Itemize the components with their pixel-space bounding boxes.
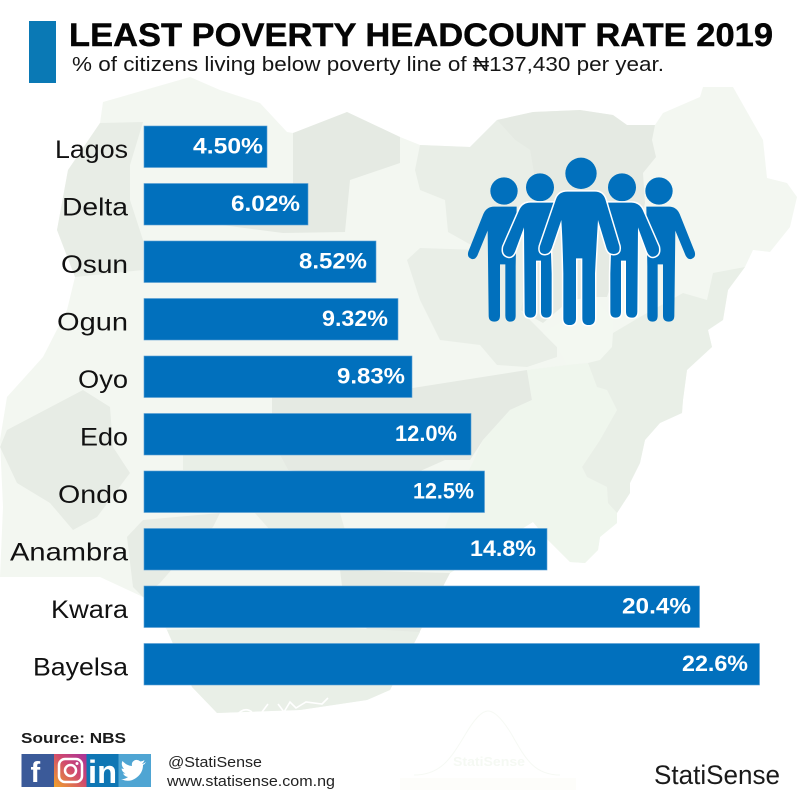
icon: facebook: f [30,757,40,789]
bar: Delta: Delta [62,194,128,222]
bar: Osun [61,241,376,282]
bar: Kwara [51,586,700,628]
bar: Ondo [58,471,484,512]
brand logotype: StatiSense [654,760,780,790]
bar: Osun: Osun [61,251,128,279]
bar: Osun: 8.52% [299,248,367,274]
bar: Ondo: Ondo [58,481,128,509]
bar: Lagos [55,126,267,168]
icon: instagram [54,754,86,787]
title: LEAST POVERTY HEADCOUNT RATE 2019 [69,17,773,53]
subtitle: % of citizens living below poverty line of ₦137,430 per year. [72,54,664,76]
bar: Delta: 6.02% [231,191,300,216]
bar: Delta [62,184,308,225]
website address: www.statisense.com.ng [166,774,335,790]
watermark: bell curve logo: StatiSense [453,754,525,769]
bar: Ondo: 12.5% [413,478,474,504]
bar: Oyo: Oyo [78,366,128,394]
bar: Ogun: 9.32% [322,306,388,331]
icon: linkedin: in [88,754,117,790]
icon: group of five people [468,158,695,325]
bar: Anambra: Anambra [10,538,128,566]
icon: twitter [118,754,151,787]
social handle: @StatiSense [168,755,262,771]
watermark: bell curve logo [400,711,576,790]
bar: Ogun: Ogun [57,308,128,336]
bar: Bayelsa [33,644,760,685]
bar: Edo: 12.0% [395,421,457,446]
bar: Kwara: Kwara [51,596,128,624]
title accent block [29,21,56,83]
bar: Ogun [57,298,398,340]
source note: Source: NBS [21,730,126,747]
background map of Nigeria [0,77,797,716]
social media icons [22,754,151,790]
bar: Anambra: 14.8% [470,536,536,561]
bar: Lagos: Lagos [55,136,128,164]
bar: Lagos: 4.50% [193,134,263,158]
bar: Anambra [10,528,547,570]
bar chart [10,126,760,685]
bar: Oyo [78,356,412,398]
bar: Edo: Edo [80,424,128,452]
bar: Kwara: 20.4% [622,594,691,618]
bar: Oyo: 9.83% [337,364,405,388]
bar: Bayelsa: Bayelsa [33,654,128,682]
bar: Edo [80,414,471,455]
bar: Bayelsa: 22.6% [682,651,748,676]
